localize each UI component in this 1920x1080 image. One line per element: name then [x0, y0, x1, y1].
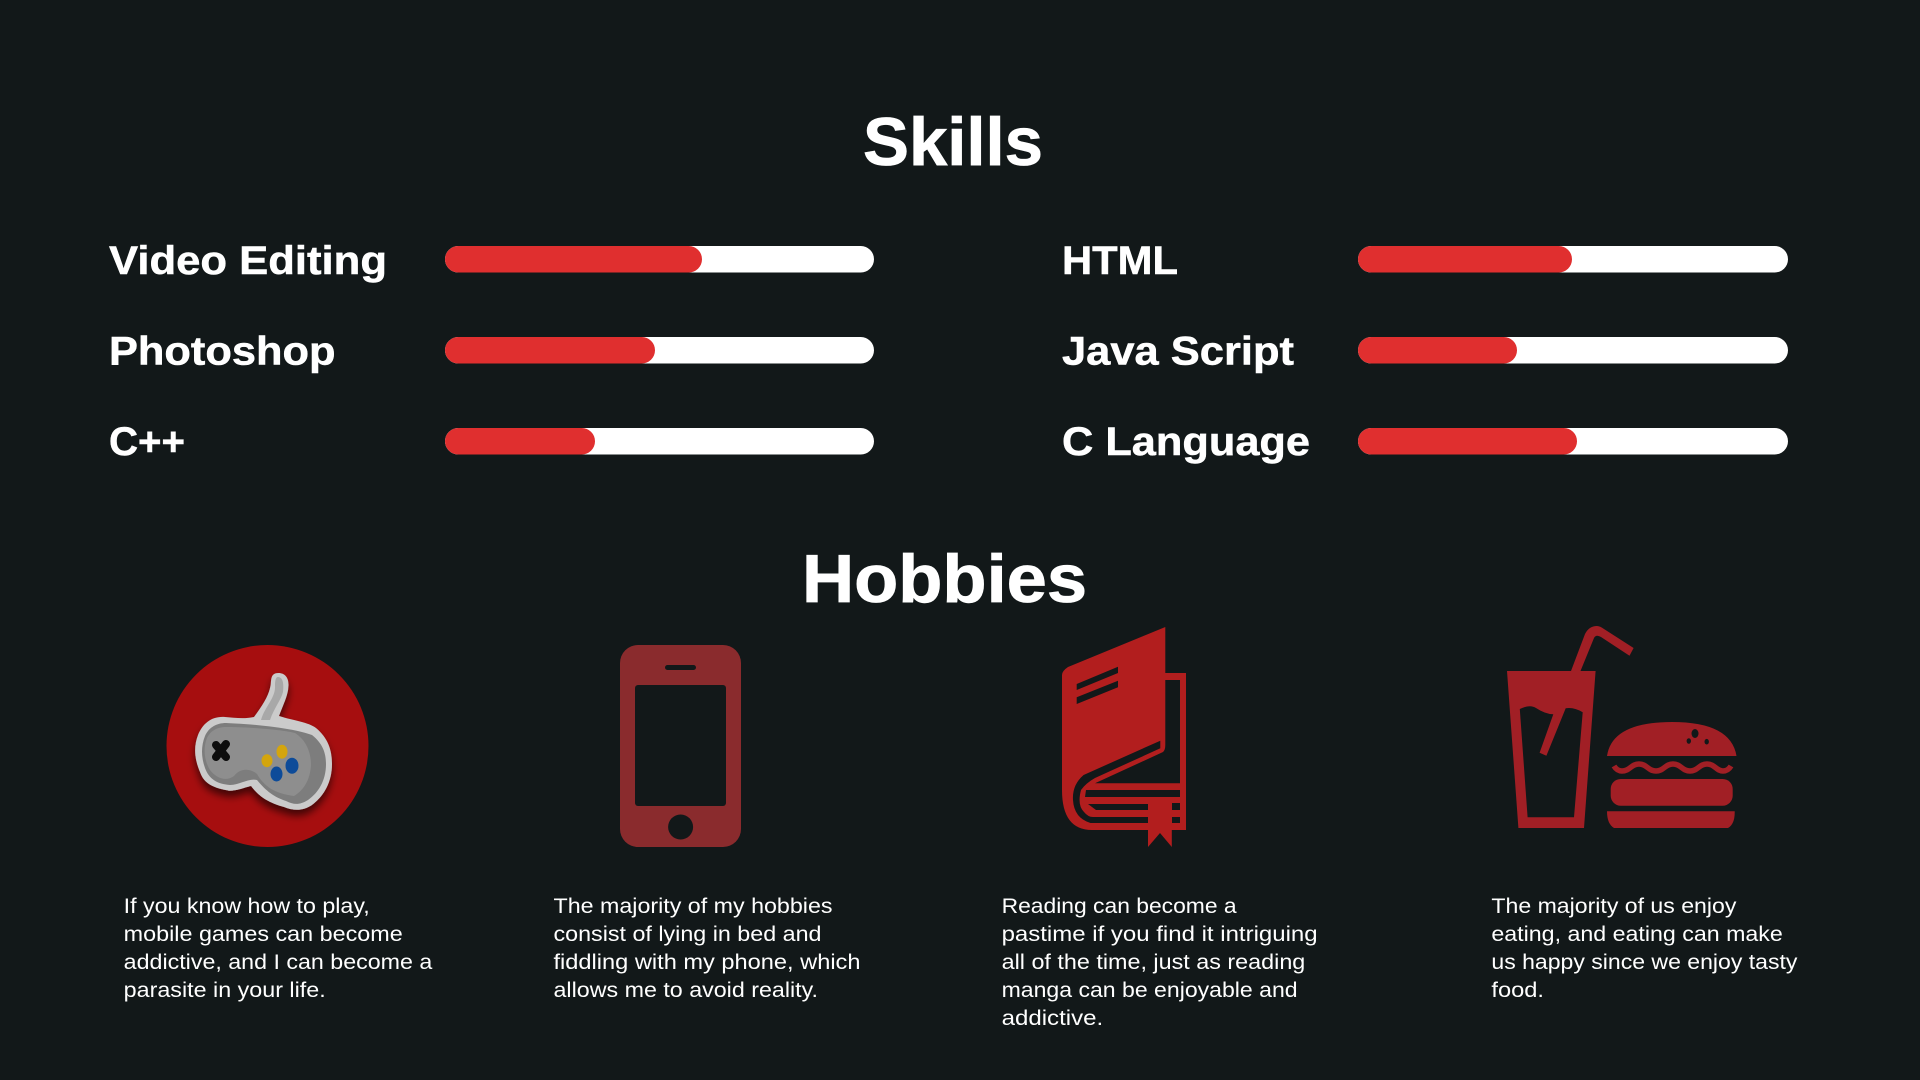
text: games	[124, 894, 432, 1002]
skill: HTML: HTML	[1062, 239, 1178, 283]
text: reading: pastime if you find it intriguing	[1002, 922, 1318, 946]
text: reading: manga can be enjoyable and	[1002, 978, 1298, 1002]
skill: C++: C++	[109, 420, 185, 464]
skill: Video Editing	[109, 239, 874, 283]
skill: C++	[109, 420, 874, 464]
text: reading: all of the time, just as reading	[1002, 950, 1305, 974]
text: food: eating, and eating can make	[1491, 922, 1783, 946]
text: food	[1491, 894, 1798, 1002]
text: phone: consist of lying in bed and	[554, 922, 822, 946]
skill: C Language: C Language	[1062, 420, 1310, 464]
text: reading: Reading can become a	[1002, 894, 1237, 918]
text: phone: fiddling with my phone, which	[554, 950, 860, 974]
text: games: If you know how to play,	[124, 894, 370, 918]
text: food: us happy since we enjoy tasty	[1491, 950, 1798, 974]
text: food: The majority of us enjoy	[1491, 894, 1737, 918]
skill: Photoshop: Photoshop	[109, 330, 336, 374]
text: phone: allows me to avoid reality.	[554, 978, 818, 1002]
text: games: parasite in your life.	[124, 978, 326, 1002]
skill: Java Script: Java Script	[1062, 330, 1294, 374]
skill: C Language	[1062, 420, 1788, 464]
text: games: mobile games can become	[124, 922, 403, 946]
text: games: addictive, and I can become a	[124, 950, 432, 974]
skill: Video Editing: Video Editing	[109, 239, 387, 283]
icon: book with bookmark	[1062, 627, 1186, 847]
icon: game controller on red circle	[166, 645, 368, 847]
text: reading	[1002, 894, 1318, 1030]
text: food: food.	[1491, 978, 1544, 1002]
skill: Java Script	[1062, 330, 1788, 374]
text: phone: The majority of my hobbies	[554, 894, 832, 918]
icon: drink and burger	[1507, 626, 1736, 828]
text: phone	[554, 894, 860, 1002]
text: reading: addictive.	[1002, 1006, 1103, 1030]
icon: smartphone	[620, 645, 741, 847]
title: Hobbies: Hobbies	[802, 541, 1087, 617]
skill: HTML	[1062, 239, 1788, 283]
title: Skills: Skills	[863, 104, 1043, 180]
skill: Photoshop	[109, 330, 874, 374]
